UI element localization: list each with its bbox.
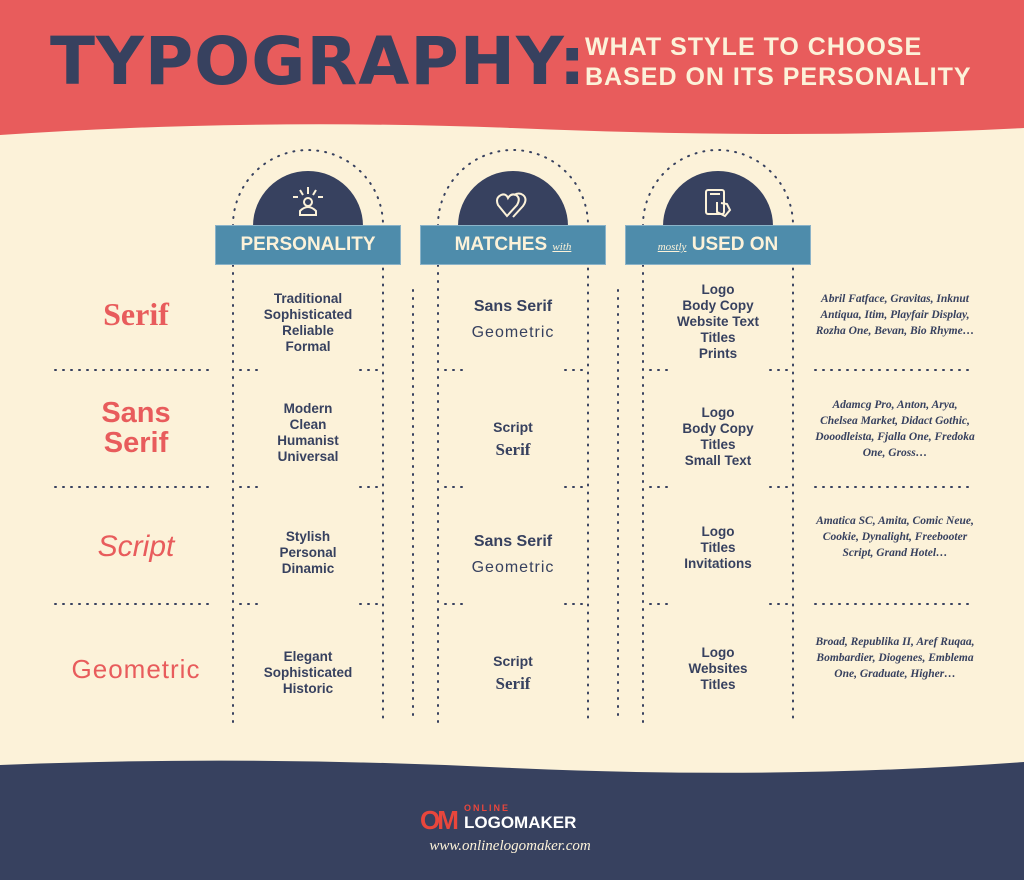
text: Serif <box>496 674 530 693</box>
footer url: www.onlinelogomaker.com <box>429 838 591 854</box>
text: Body Copy <box>682 298 754 313</box>
footer logo: LOGOMAKER <box>464 813 576 832</box>
text: Historic <box>283 681 333 696</box>
text: Titles <box>700 677 736 692</box>
text: Titles <box>700 330 736 345</box>
title <box>50 23 972 100</box>
text: Sophisticated <box>264 665 352 680</box>
row 2: sans serif: Serif <box>104 427 168 459</box>
text: Titles <box>700 540 736 555</box>
text: Prints <box>699 346 737 361</box>
footer logo: ONLINE <box>464 803 510 813</box>
icon: tablet <box>705 189 732 218</box>
text: Reliable <box>282 323 334 338</box>
footer logo <box>420 803 576 835</box>
text: Amatica SC, Amita, Comic Neue, Cookie, Dynalight, Freebooter Script, Grand Hotel… <box>816 515 974 559</box>
text: Adamcg Pro, Anton, Arya, Chelsea Market, Didact Gothic, Dooodleista, Fjalla One, Fredoka One, Gross… <box>815 399 975 459</box>
text: Formal <box>285 339 330 354</box>
title: WHAT STYLE TO CHOOSE <box>585 33 922 61</box>
row 3: script: Script <box>98 530 174 563</box>
text: Traditional <box>274 291 342 306</box>
title: BASED ON ITS PERSONALITY <box>585 63 972 91</box>
label: matches with: MATCHES with <box>455 234 571 255</box>
text: Serif <box>496 440 530 459</box>
text: Script <box>493 653 533 669</box>
text: Abril Fatface, Gravitas, Inknut Antiqua, Itim, Playfair Display, Rozha One, Bevan, Bio Rhyme… <box>816 293 974 337</box>
label: personality <box>215 225 401 265</box>
text: Body Copy <box>682 421 754 436</box>
text: Sans Serif <box>474 298 552 315</box>
icon: person <box>293 187 323 216</box>
row 1: serif: Serif <box>103 296 169 332</box>
text: Sans Serif <box>474 533 552 550</box>
text: Sophisticated <box>264 307 352 322</box>
text: Website Text <box>677 314 759 329</box>
text: Geometric <box>472 559 554 576</box>
row 4: geometric: Geometric <box>72 654 200 684</box>
row 2: sans serif: Sans <box>101 397 171 429</box>
text: Geometric <box>472 324 554 341</box>
label: used on <box>625 225 811 265</box>
label: used on: mostly USED ON <box>658 234 778 255</box>
text: Broad, Republika II, Aref Ruqaa, Bombardier, Diogenes, Emblema One, Graduate, Higher… <box>815 636 974 680</box>
footer logo: OM <box>420 805 456 835</box>
row 2: sans serif <box>101 397 171 459</box>
text: Invitations <box>684 556 752 571</box>
text: Universal <box>278 449 338 464</box>
icon: hearts <box>496 192 526 218</box>
text: Dinamic <box>282 561 334 576</box>
text: Logo <box>702 282 734 297</box>
text: Logo <box>702 405 734 420</box>
text: Logo <box>702 524 734 539</box>
text: Script <box>493 419 533 435</box>
text: Modern <box>284 401 332 416</box>
label: matches with <box>420 225 606 265</box>
text: Titles <box>700 437 736 452</box>
text: Small Text <box>685 453 751 468</box>
text: Personal <box>279 545 337 560</box>
text: Logo <box>702 645 734 660</box>
text: Websites <box>688 661 748 676</box>
title: TYPOGRAPHY: <box>50 23 586 100</box>
label: personality: PERSONALITY <box>240 234 376 255</box>
text: Humanist <box>277 433 339 448</box>
text: Elegant <box>284 649 332 664</box>
text: Stylish <box>286 529 330 544</box>
text: Clean <box>290 417 326 432</box>
